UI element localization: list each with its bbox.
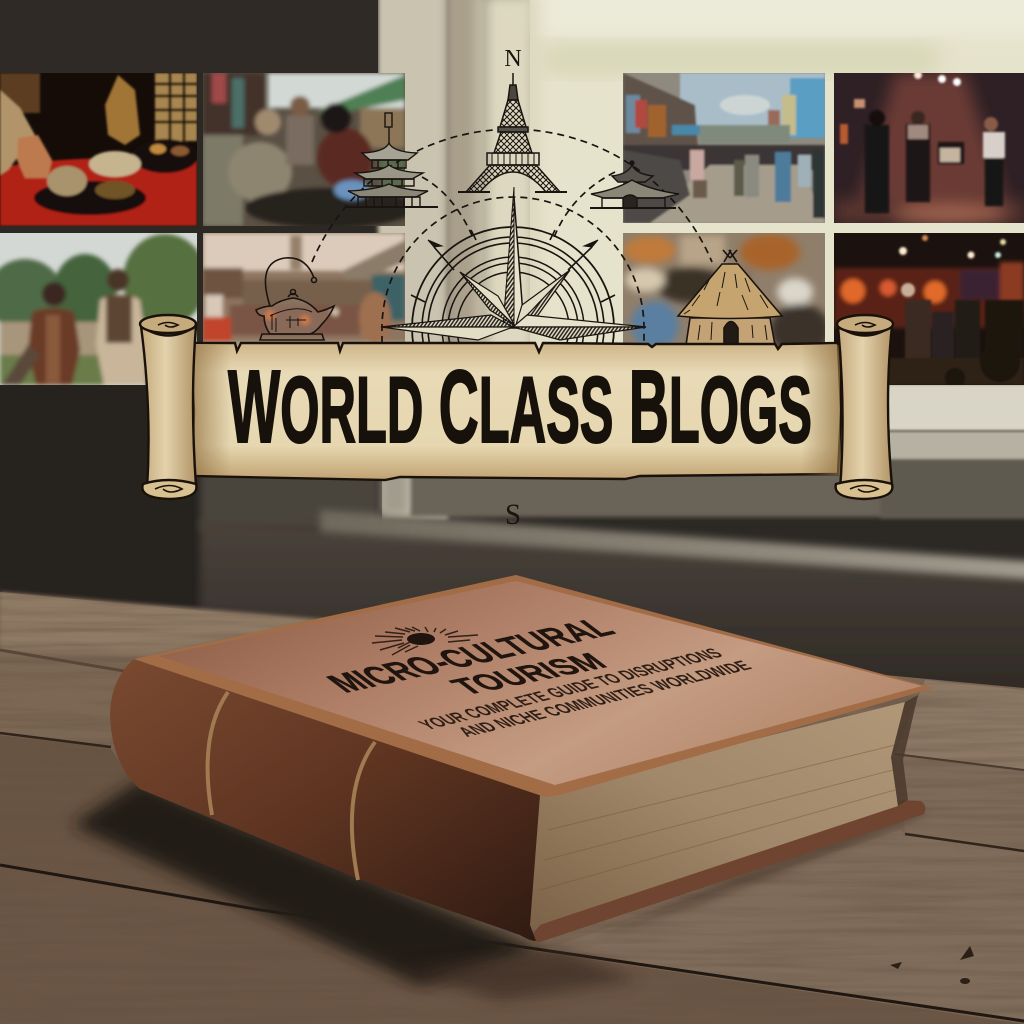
photo: stage performance — [834, 71, 1024, 225]
cover title: Micro-Cultural: MICRO-CULTURAL — [318, 613, 624, 698]
banner parchment — [190, 343, 841, 480]
cover title: Tourism: TOURISM — [443, 649, 615, 700]
icon: right temple — [590, 161, 679, 208]
book page block — [530, 702, 905, 928]
banner right roll — [836, 315, 893, 499]
compass rose — [381, 187, 646, 429]
photo: tea ceremony — [0, 73, 198, 226]
book back cover edge — [528, 800, 925, 942]
cover subtitle line one: YOUR COMPLETE GUIDE TO DISRUPTIONS — [415, 646, 728, 733]
icon: left pagoda — [345, 113, 438, 207]
icon: Eiffel tower — [458, 73, 567, 192]
cover subtitle line two: AND NICHE COMMUNITIES WORLDWIDE — [454, 658, 757, 740]
icon: sun emblem — [372, 627, 478, 655]
icon: thatched hut — [678, 250, 782, 345]
photo: blurred market close-up — [623, 233, 825, 347]
photo: villagers in field — [0, 233, 207, 385]
book spine — [110, 659, 540, 941]
spine ridges — [208, 692, 375, 880]
photo: crowded street — [623, 73, 825, 223]
book top cover — [134, 575, 934, 797]
leather-bound book — [110, 575, 934, 942]
compass north label: N — [504, 46, 522, 72]
banner left roll — [140, 315, 196, 499]
photo: red-lit venue — [834, 233, 1024, 388]
dashed route arcs — [312, 129, 712, 343]
photo: busy street — [203, 233, 405, 348]
banner title: WORLD CLASS BLOGS — [228, 349, 812, 464]
compass south label: S — [505, 498, 521, 531]
photo: market family — [203, 73, 415, 228]
icon: teapot — [256, 258, 334, 340]
scroll banner — [140, 315, 893, 499]
wooden table — [0, 590, 1024, 1024]
